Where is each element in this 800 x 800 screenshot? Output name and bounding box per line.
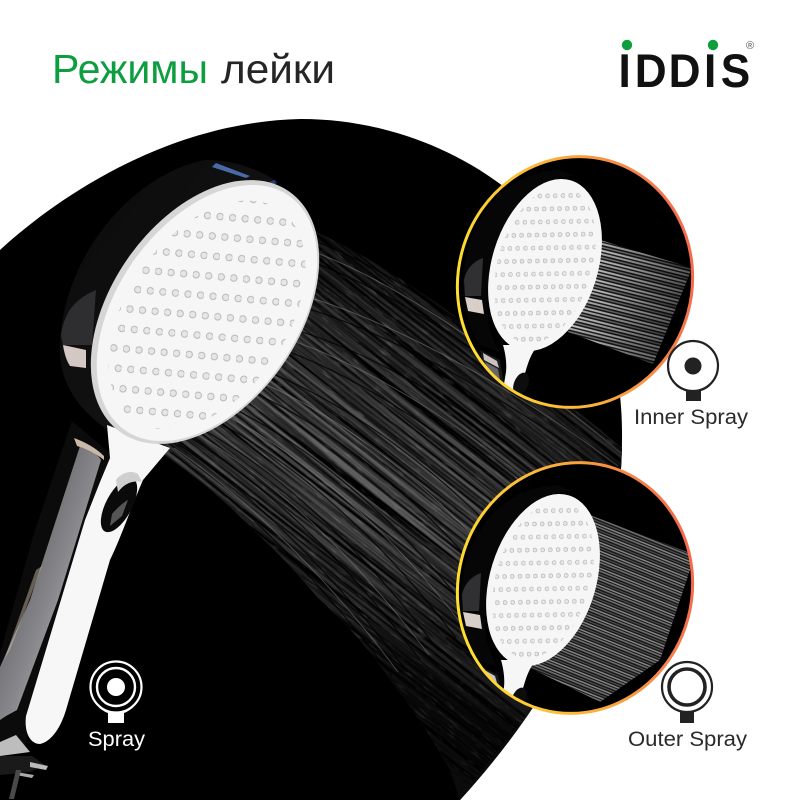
shower face — [51, 144, 363, 482]
water spray — [158, 232, 622, 800]
title — [52, 46, 335, 92]
inset spray beams — [568, 240, 692, 364]
inset: outer spray — [456, 461, 694, 715]
inset: inner spray — [456, 155, 694, 409]
label: Inner Spray: Inner Spray — [634, 406, 749, 429]
inset background — [431, 131, 719, 433]
logo: IDDIS: IDDIS — [618, 44, 750, 97]
hose connector — [0, 735, 48, 799]
chrome back of the head — [60, 160, 278, 440]
chrome side panel of the handle — [0, 421, 112, 752]
inset background — [431, 437, 719, 739]
inset shower head — [464, 179, 602, 394]
shower head: main — [0, 160, 320, 799]
inset gradient ring — [429, 130, 721, 434]
logo: IDDIS: ® — [746, 40, 754, 52]
inset shower head — [462, 494, 600, 702]
title: Режимы — [52, 46, 208, 92]
icon: outer spray — [662, 662, 712, 723]
icon: spray — [90, 662, 142, 723]
title: лейки — [221, 46, 335, 92]
label: Outer Spray: Outer Spray — [628, 728, 748, 751]
inset spray beams — [530, 515, 695, 702]
label: Spray: Spray — [88, 728, 146, 751]
inset gradient ring — [429, 436, 721, 740]
black circular backdrop — [0, 119, 622, 800]
white rim — [44, 138, 366, 486]
nozzle dots — [108, 200, 306, 430]
icon: inner spray — [668, 341, 718, 401]
handle switch button — [93, 472, 145, 538]
white handle — [26, 425, 170, 744]
